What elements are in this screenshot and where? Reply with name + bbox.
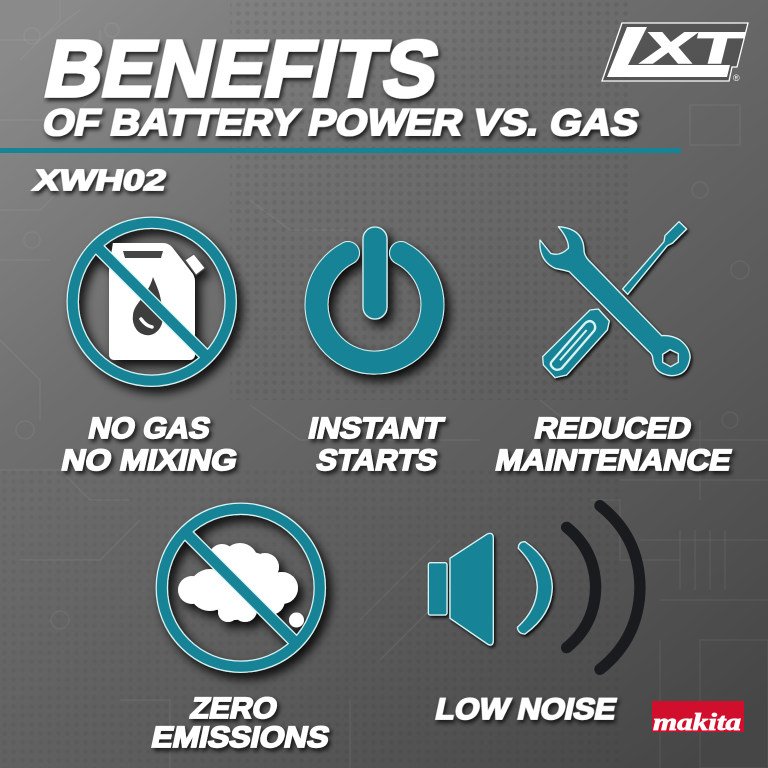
gas can body bbox=[109, 243, 195, 360]
model number: XWH02 bbox=[31, 164, 169, 197]
subtitle: OF BATTERY POWER VS. GAS bbox=[39, 101, 643, 143]
icon: no gas can bbox=[73, 223, 231, 381]
label: no gas no mixing: NO GAS bbox=[86, 412, 213, 445]
teal divider line bbox=[0, 148, 681, 153]
logo: makita bbox=[652, 701, 744, 736]
prohibition sign bbox=[73, 223, 231, 381]
can handle hole bbox=[123, 251, 163, 258]
label: zero emissions bbox=[149, 692, 332, 754]
label: instant starts: STARTS bbox=[314, 444, 440, 477]
title: BENEFITS: BENEFITS bbox=[37, 25, 447, 114]
logo: LXT: ® bbox=[733, 73, 740, 83]
label: instant starts: INSTANT bbox=[306, 412, 446, 445]
label: reduced maintenance: MAINTENANCE bbox=[493, 444, 734, 477]
can cap bbox=[185, 254, 205, 275]
icon: power button bbox=[317, 227, 432, 363]
label: no gas no mixing: NO MIXING bbox=[59, 444, 240, 477]
prohibition sign bbox=[162, 509, 320, 667]
icon: speaker bbox=[428, 506, 640, 669]
wrench bbox=[540, 227, 690, 376]
icon: wrench and screwdriver bbox=[540, 222, 690, 378]
screwdriver bbox=[623, 222, 687, 294]
logo: LXT: XT bbox=[638, 25, 748, 73]
label: reduced maintenance: REDUCED bbox=[532, 412, 694, 445]
logo: LXT bbox=[602, 23, 748, 83]
cloud bbox=[178, 543, 304, 628]
label: instant starts bbox=[306, 412, 446, 477]
logo: makita: makita bbox=[653, 710, 741, 736]
label: zero emissions: ZERO bbox=[188, 692, 280, 725]
label: low noise: LOW NOISE bbox=[433, 693, 619, 726]
label: reduced maintenance bbox=[493, 412, 734, 477]
fuel drop bbox=[133, 277, 163, 335]
label: zero emissions: EMISSIONS bbox=[149, 721, 332, 754]
icon: no emissions cloud bbox=[162, 509, 320, 667]
label: no gas no mixing bbox=[59, 412, 240, 477]
